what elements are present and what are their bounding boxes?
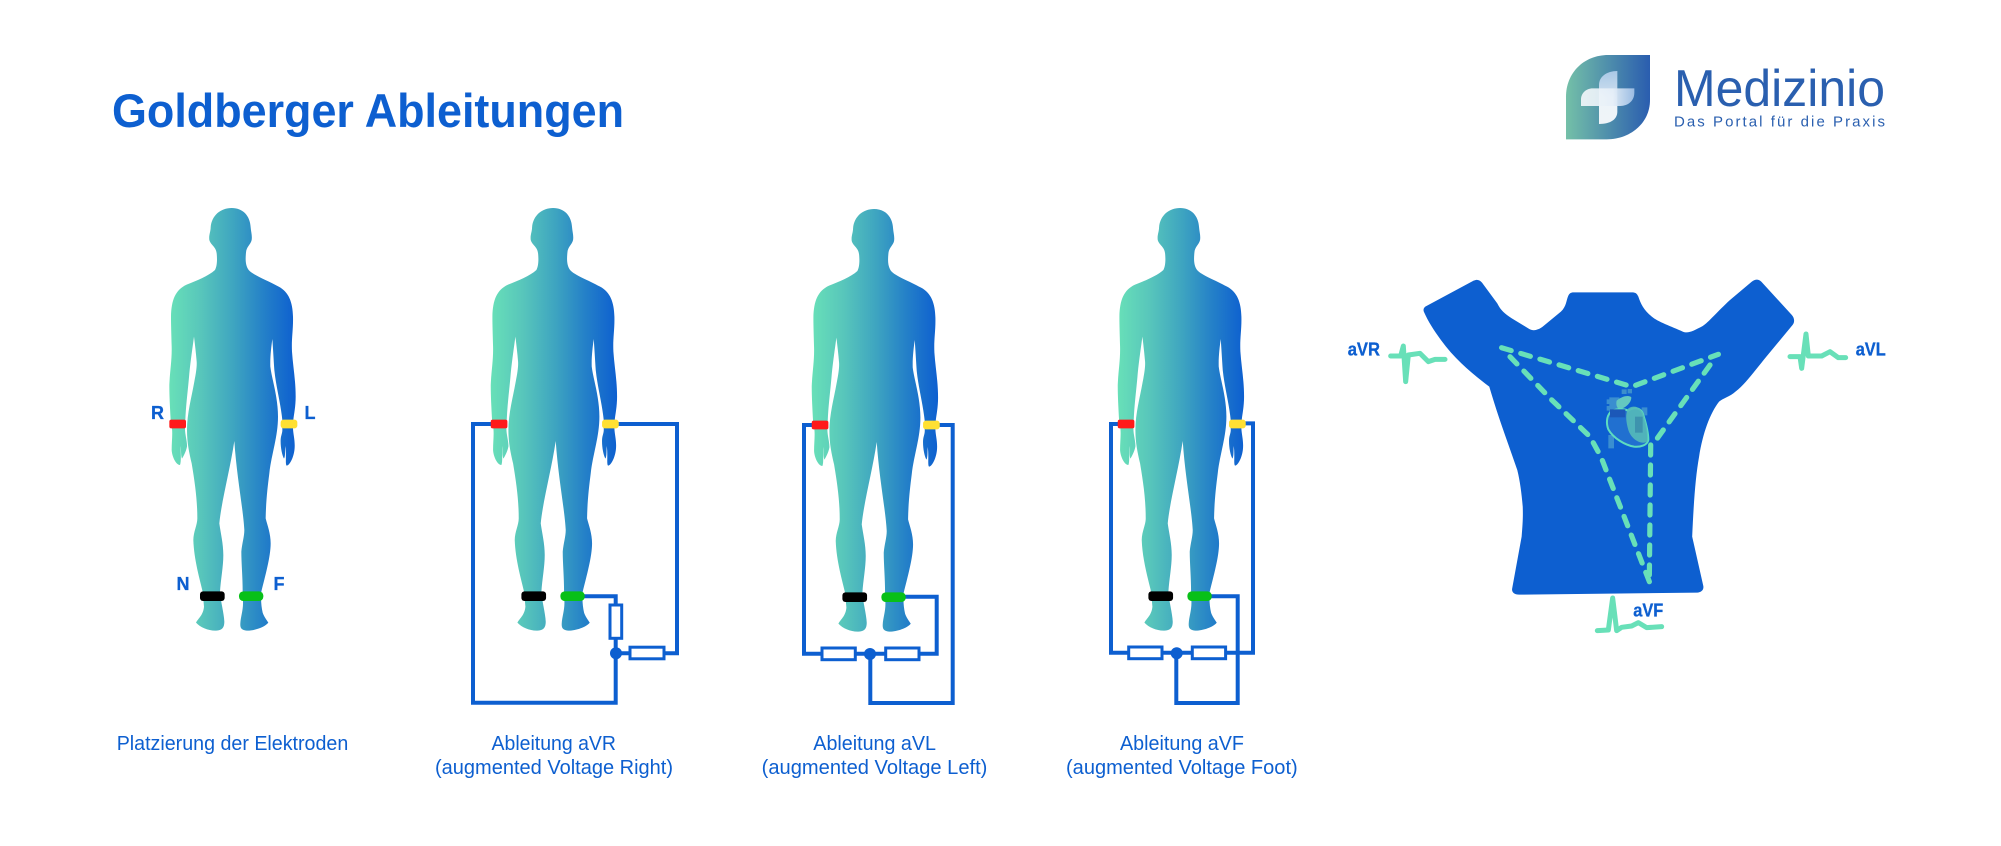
dashed line: right to heart bbox=[1657, 365, 1710, 438]
circuit wires aVL bbox=[804, 425, 953, 703]
figure: lead aVL bbox=[804, 209, 953, 703]
dashed line: left to foot bbox=[1510, 357, 1650, 583]
heart illustration bbox=[1607, 389, 1648, 448]
figure: lead aVR bbox=[473, 208, 677, 703]
logo tagline: Das Portal für die Praxis bbox=[1674, 114, 1885, 130]
logo icon: leaf with cross bbox=[1566, 55, 1650, 139]
caption: lead aVR: Ableitung aVR bbox=[492, 733, 616, 755]
body aVF bbox=[1118, 208, 1246, 631]
ECG trace aVR bbox=[1391, 346, 1445, 382]
figure: electrode placement bbox=[151, 208, 316, 631]
logo wordmark: Medizinio bbox=[1674, 60, 1885, 118]
body aVL bbox=[812, 209, 940, 632]
label R: R bbox=[151, 403, 164, 423]
caption: electrode placement: Platzierung der Elektroden bbox=[117, 733, 348, 755]
caption: lead aVL: Ableitung aVL bbox=[813, 733, 936, 755]
caption: lead aVR: (augmented Voltage Right) bbox=[435, 757, 673, 779]
caption: lead aVF bbox=[1066, 733, 1298, 779]
figure: lead aVF bbox=[1111, 208, 1253, 703]
logo: Medizinio bbox=[1566, 55, 1885, 139]
body aVR bbox=[491, 208, 619, 631]
dashed line: upper chevron bbox=[1502, 348, 1718, 387]
circuit wires aVF bbox=[1111, 423, 1253, 703]
circuit wires aVR bbox=[473, 424, 677, 703]
dashed line: heart to foot bbox=[1649, 445, 1651, 582]
torso silhouette bbox=[1424, 280, 1794, 595]
ECG trace aVL bbox=[1790, 334, 1846, 368]
title: Goldberger Ableitungen bbox=[112, 84, 624, 137]
caption: lead aVF: (augmented Voltage Foot) bbox=[1066, 757, 1298, 779]
figure: torso with leads bbox=[1424, 280, 1794, 595]
caption: lead aVL bbox=[762, 733, 987, 779]
caption: lead aVF: Ableitung aVF bbox=[1120, 733, 1244, 755]
body with electrodes bbox=[169, 208, 297, 631]
caption: lead aVR bbox=[435, 733, 673, 779]
label L: L bbox=[304, 403, 316, 423]
label N: N bbox=[176, 574, 190, 594]
label aVR: aVR bbox=[1348, 340, 1380, 360]
ECG trace aVF bbox=[1597, 598, 1662, 631]
label aVL: aVL bbox=[1856, 340, 1886, 360]
caption: lead aVL: (augmented Voltage Left) bbox=[762, 757, 987, 779]
label F: F bbox=[274, 574, 284, 594]
label aVF: aVF bbox=[1633, 601, 1663, 621]
